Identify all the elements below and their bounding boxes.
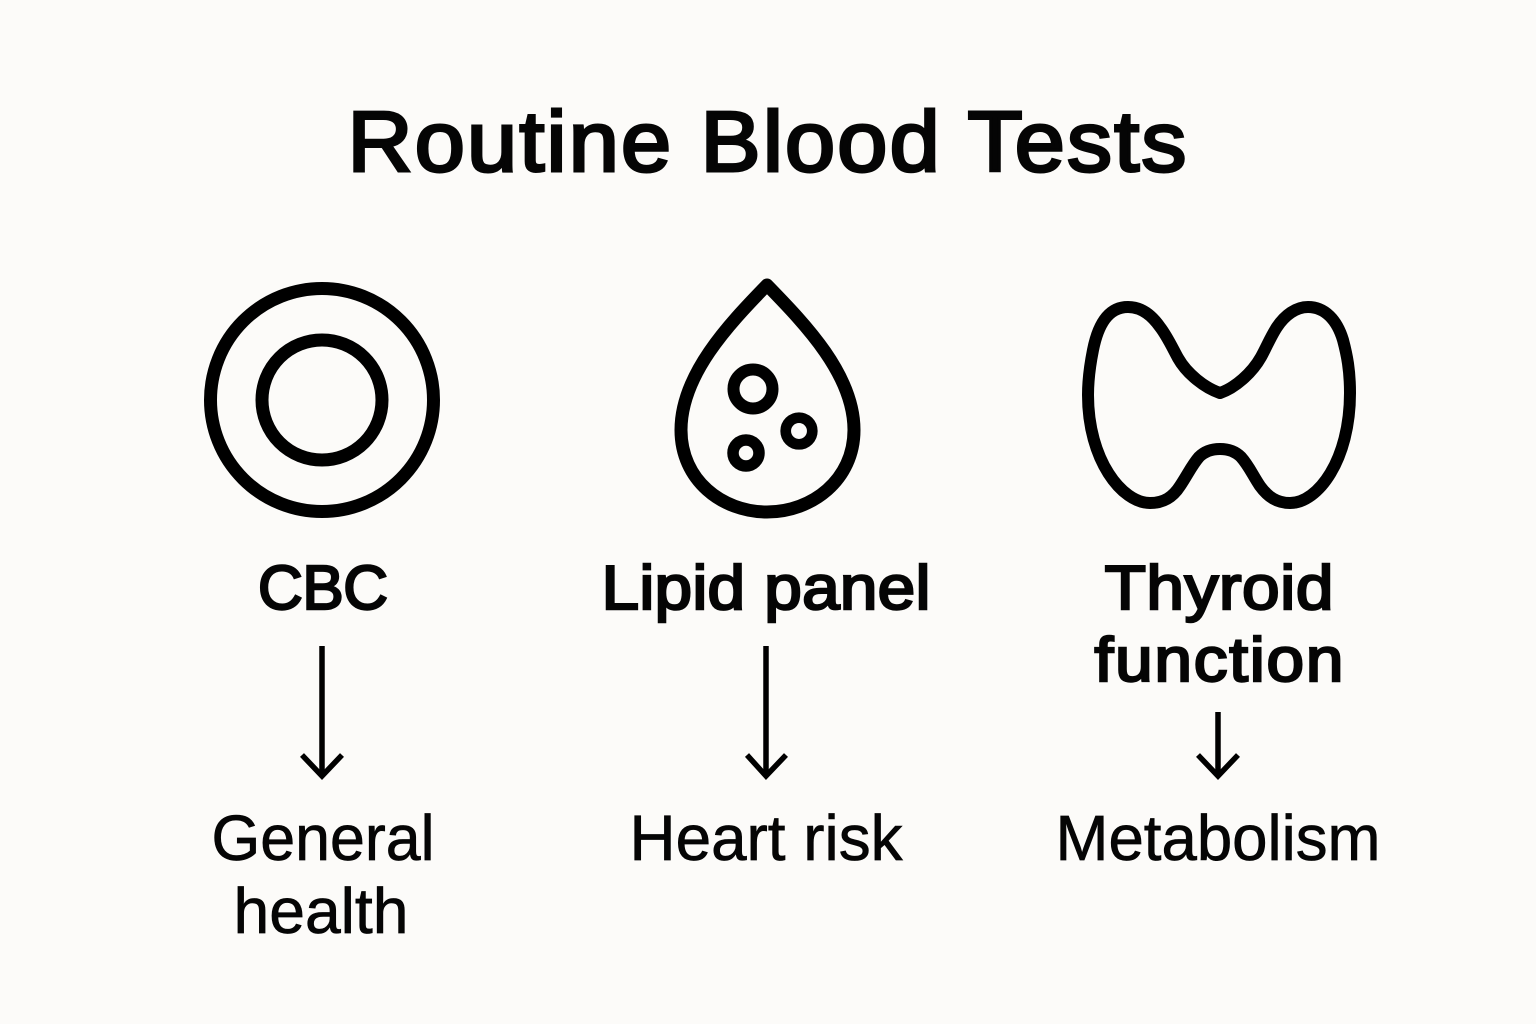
label: general health: health (234, 875, 408, 947)
heading: thyroid function: Thyroid (1105, 553, 1333, 622)
heading: CBC: CBC (258, 554, 388, 623)
label: general health: General (212, 802, 434, 874)
heading: thyroid function: function (1095, 625, 1343, 694)
label: general health (212, 802, 434, 947)
icon: droplet with lipid particles (681, 285, 854, 512)
icon: red blood cell (210, 288, 434, 512)
arrow: lipid panel to heart risk (747, 646, 786, 776)
title: Routine Blood Tests (348, 94, 1186, 189)
column: CBC (210, 288, 434, 947)
heading: lipid panel: Lipid panel (602, 553, 930, 622)
column: thyroid function (1056, 307, 1380, 874)
arrow: thyroid function to metabolism (1198, 712, 1238, 776)
column: lipid panel (602, 285, 930, 874)
label: heart risk: Heart risk (630, 802, 903, 874)
heading: thyroid function (1095, 553, 1343, 694)
arrow: CBC to general health (302, 646, 342, 776)
label: metabolism: Metabolism (1056, 802, 1380, 874)
icon: thyroid gland (1088, 307, 1350, 503)
